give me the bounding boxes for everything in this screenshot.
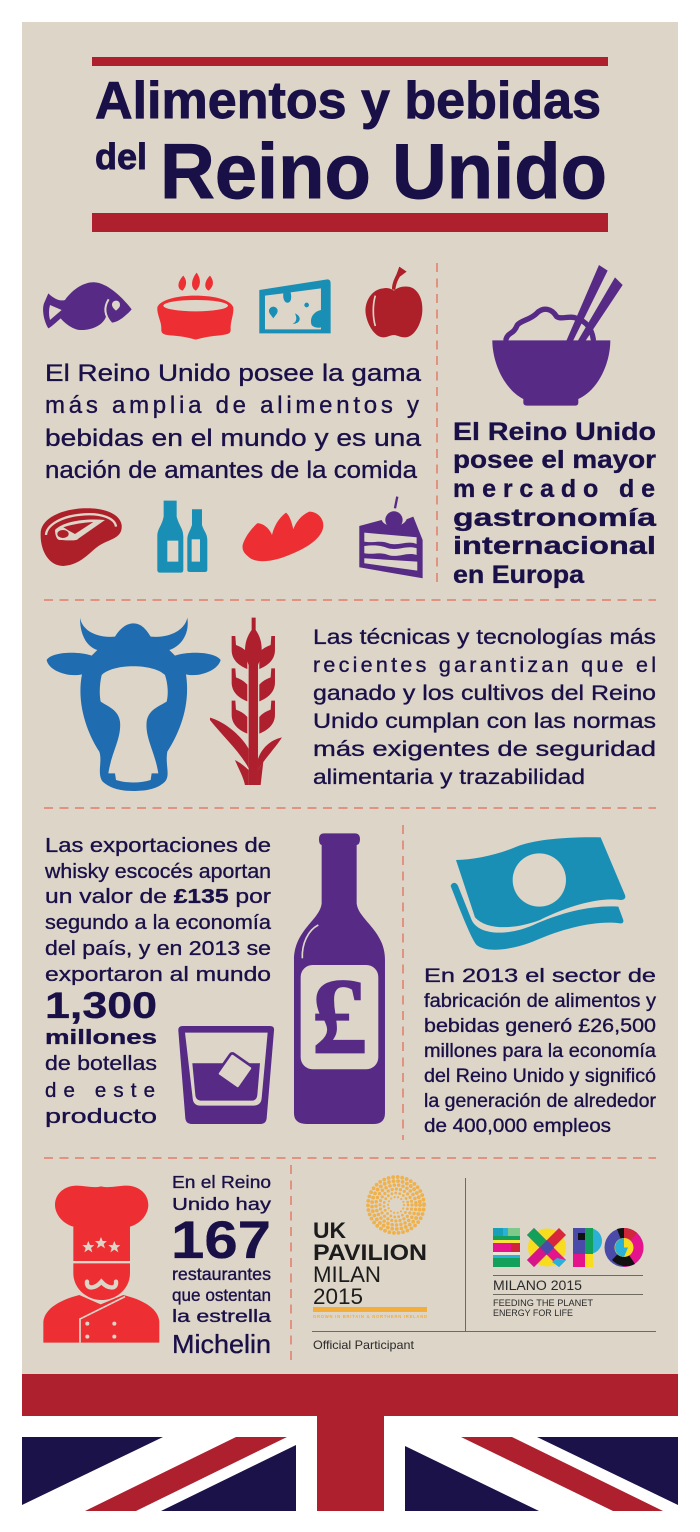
icon: whisky glass [178, 1026, 274, 1124]
title word: del: del [95, 136, 147, 177]
official participant label: Official Participant [313, 1338, 415, 1352]
paragraph line 4: nación de amantes de la comida [45, 457, 418, 484]
whisky line 3: un valor de £135 por [45, 885, 271, 908]
logo: UK Pavilion [313, 1177, 427, 1319]
whisky line este: de este [45, 1079, 155, 1102]
sunflower [368, 1177, 424, 1233]
icon: banknotes [451, 837, 625, 950]
paragraph line 2: más amplia de alimentos y [45, 392, 419, 419]
icon: soup bowl [157, 273, 233, 340]
icon: fish [43, 282, 132, 330]
icon: rice bowl with chopsticks [492, 265, 623, 406]
2015 word: 2015 [313, 1284, 363, 1309]
technology line 4: Unido cumplan con las normas [313, 709, 656, 733]
michelin line 4: que ostentan [172, 1285, 271, 1305]
Milano 2015 label: MILANO 2015 [493, 1278, 582, 1293]
title line 1: Alimentos y bebidas [95, 72, 601, 130]
technology line 6: alimentaria y trazabilidad [313, 765, 585, 789]
pound sign: £ [312, 956, 367, 1076]
orange bar [313, 1307, 427, 1312]
expo rule lines [493, 1276, 643, 1294]
energy for life: ENERGY FOR LIFE [493, 1308, 573, 1319]
bold line 1: El Reino Unido [453, 418, 656, 446]
michelin word: Michelin [172, 1329, 271, 1359]
manufacturing line 1: En 2013 el sector de [424, 966, 656, 987]
paragraph line 1: El Reino Unido posee la gama [45, 360, 422, 387]
manufacturing line 4: millones para la economía [424, 1041, 656, 1062]
big number 1,300: 1,300 [45, 985, 157, 1026]
whisky line 6: exportaron al mundo [45, 963, 271, 986]
icon: bottle with pound sign [294, 833, 385, 1124]
union flag [22, 1374, 678, 1511]
icon: steak [41, 508, 122, 566]
whisky line botellas: de botellas [45, 1052, 157, 1075]
icon: cow [47, 618, 221, 791]
manufacturing line 6: la generación de alrededor [424, 1091, 657, 1112]
bold line 3: mercado de [453, 475, 655, 503]
manufacturing line 5: del Reino Unido y significó [424, 1066, 656, 1087]
title top bar [92, 57, 608, 66]
bold line 4: gastronomía [453, 504, 657, 532]
right paragraph bold [453, 418, 657, 589]
logo: Expo Milano 2015 [493, 1228, 644, 1319]
technology line 1: Las técnicas y tecnologías más [313, 625, 656, 649]
technology line 2: recientes garantizan que el [313, 653, 656, 677]
bold line 6: en Europa [453, 561, 585, 589]
feeding the planet: FEEDING THE PLANET [493, 1298, 593, 1309]
michelin line 5: la estrella [172, 1306, 271, 1326]
middle paragraph [313, 625, 656, 789]
michelin line 3: restaurantes [172, 1264, 271, 1284]
big number 167: 167 [171, 1211, 271, 1270]
expo letter P [573, 1228, 602, 1267]
Milan word: MILAN [313, 1262, 381, 1287]
food manufacturing paragraph [424, 966, 657, 1137]
tagline: GROWN IN BRITAIN & NORTHERN IRELAND [313, 1314, 427, 1319]
paragraph line 3: bebidas en el mundo y es una [45, 425, 422, 452]
whisky paragraph [44, 834, 272, 1128]
whisky line millones: millones [45, 1026, 157, 1049]
michelin text [171, 1172, 271, 1359]
manufacturing line 7: de 400,000 empleos [424, 1116, 611, 1137]
manufacturing line 3: bebidas generó £26,500 [424, 1016, 656, 1037]
icon: apple [365, 267, 422, 337]
title block [92, 57, 608, 232]
icon: bread [243, 512, 323, 561]
UK word: UK [313, 1218, 346, 1243]
whisky line 4: segundo a la economía [45, 911, 272, 934]
whisky line 5: del país, y en 2013 se [45, 937, 271, 960]
technology line 5: más exigentes de seguridad [313, 737, 656, 761]
technology line 3: ganado y los cultivos del Reino [313, 681, 656, 705]
title bottom bar [92, 213, 608, 232]
manufacturing line 2: fabricación de alimentos y [424, 991, 657, 1012]
expo letter X [527, 1228, 566, 1267]
expo letter O [604, 1228, 644, 1267]
whisky line 1: Las exportaciones de [45, 834, 271, 857]
title line 2: Reino Unido [160, 127, 607, 215]
left paragraph [45, 360, 422, 484]
michelin line 1: En el Reino [172, 1172, 271, 1192]
icon: chef [43, 1186, 159, 1343]
bold line 5: internacional [453, 532, 656, 560]
whisky line producto: producto [45, 1105, 157, 1128]
icon: cheese [259, 279, 331, 333]
michelin line 2: Unido hay [172, 1194, 271, 1214]
whisky line 2: whisky escocés aportan [44, 860, 271, 883]
Pavilion word: PAVILION [313, 1240, 427, 1265]
expo letter E [493, 1228, 520, 1267]
bold line 2: posee el mayor [453, 446, 656, 474]
icon: cake [359, 497, 423, 578]
icon: bottles [157, 501, 207, 573]
icon: wheat [210, 618, 282, 785]
